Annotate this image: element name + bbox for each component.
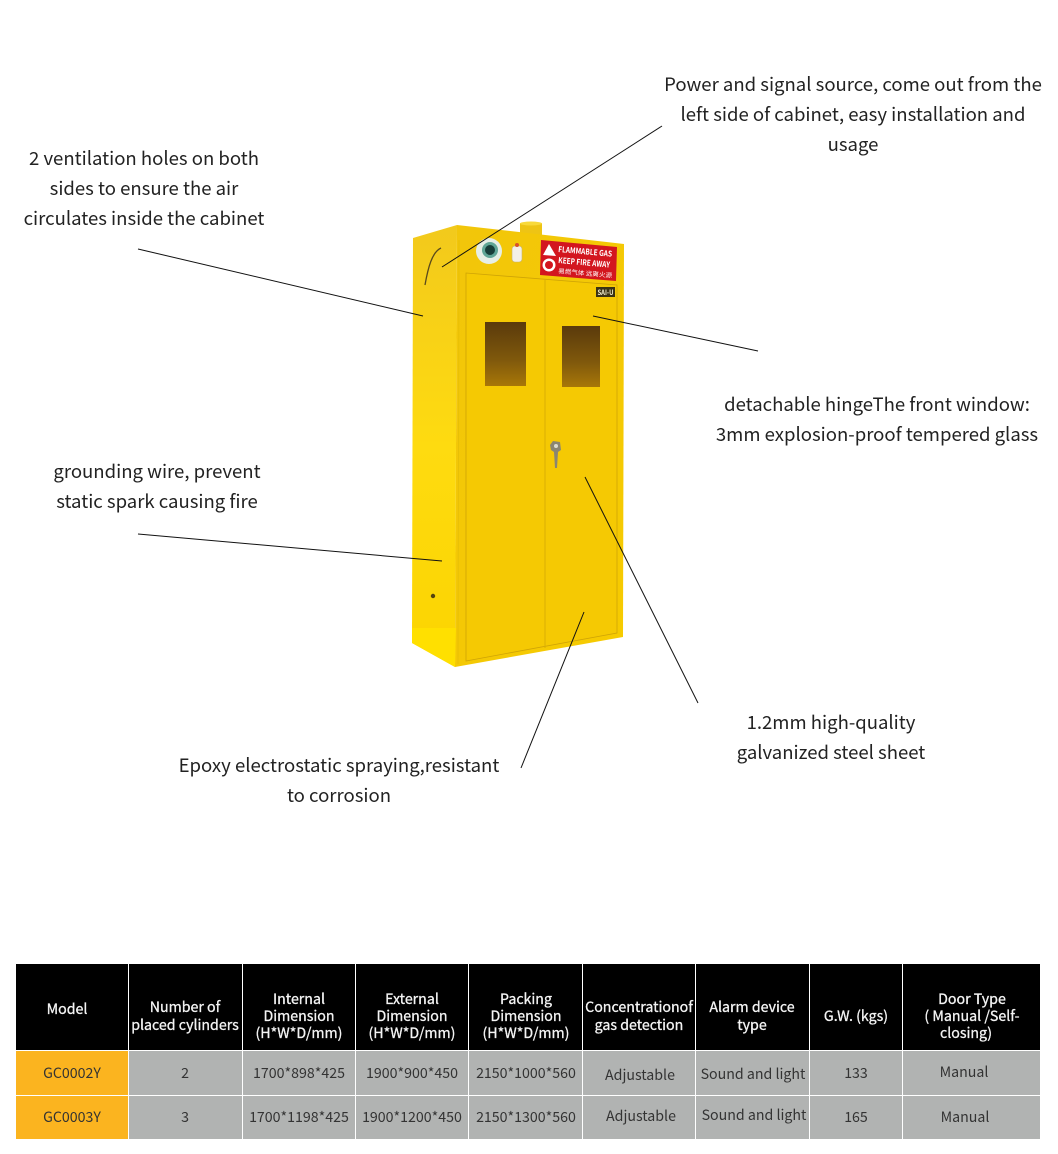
table header row: Packing bbox=[500, 989, 552, 1009]
warning sign: 易燃气体 远离火源 bbox=[558, 266, 612, 280]
table row: GC0002Y: Sound and light bbox=[701, 1064, 806, 1084]
callout: steel sheet bbox=[737, 708, 925, 765]
table row: GC0003Y: 1700*1198*425 bbox=[249, 1107, 349, 1127]
callout: power and signal source: left side of cabinet, easy installation and bbox=[681, 100, 1025, 127]
leader line: hinge and front window bbox=[593, 316, 758, 351]
table row: GC0003Y: Manual bbox=[941, 1107, 989, 1127]
table row: GC0003Y: 2150*1300*560 bbox=[476, 1107, 576, 1127]
cabinet bottom edge bbox=[412, 628, 456, 667]
table row: GC0002Y: 133 bbox=[844, 1063, 868, 1083]
table header row: Number of bbox=[150, 997, 222, 1017]
table row: GC0002Y: 1900*900*450 bbox=[366, 1063, 458, 1083]
table row: GC0003Y: 165 bbox=[844, 1107, 868, 1127]
callout: ventilation holes bbox=[24, 144, 264, 231]
table header row: Concentrationof bbox=[585, 997, 694, 1017]
callout: grounding wire bbox=[53, 457, 261, 514]
callout: power and signal source: usage bbox=[828, 130, 878, 157]
table row: GC0002Y: 1700*898*425 bbox=[253, 1063, 345, 1083]
callout: hinge and front window: detachable hingeThe front window: bbox=[724, 390, 1030, 417]
callout: epoxy spraying: Epoxy electrostatic spraying,resistant bbox=[179, 751, 499, 778]
leader line: ventilation holes bbox=[138, 249, 423, 316]
table row: GC0003Y: 1900*1200*450 bbox=[362, 1107, 462, 1127]
table header row: (H*W*D/mm) bbox=[256, 1023, 342, 1043]
right window bbox=[562, 326, 600, 387]
callout: steel sheet: 1.2mm high-quality bbox=[747, 708, 916, 735]
table row: GC0002Y: 2 bbox=[181, 1063, 189, 1083]
table header row bbox=[16, 964, 1040, 1050]
table header row: placed cylinders bbox=[131, 1015, 239, 1035]
leader line: epoxy spraying bbox=[521, 612, 584, 768]
ground hole bbox=[431, 594, 435, 598]
callout: ventilation holes: 2 ventilation holes on both bbox=[29, 144, 259, 171]
callout: power and signal source: Power and signal source, come out from the bbox=[664, 70, 1042, 97]
callout: hinge and front window: 3mm explosion-proof tempered glass bbox=[716, 420, 1038, 447]
callout: ventilation holes: sides to ensure the air bbox=[50, 174, 239, 201]
illustration: yellow gas cylinder cabinet bbox=[412, 222, 624, 667]
leader line: grounding wire bbox=[138, 534, 442, 561]
table header row: type bbox=[737, 1015, 767, 1035]
warning sign bbox=[540, 240, 617, 281]
cabinet left side panel bbox=[412, 225, 457, 667]
callout: ventilation holes: circulates inside the cabinet bbox=[24, 204, 264, 231]
table header row: Dimension bbox=[490, 1006, 562, 1026]
table header row: Internal bbox=[273, 989, 325, 1009]
callout: epoxy spraying: to corrosion bbox=[287, 781, 391, 808]
table header row: G.W. (kgs) bbox=[824, 1006, 888, 1026]
table row: GC0002Y: Adjustable bbox=[605, 1065, 675, 1085]
table header row: gas detection bbox=[595, 1015, 683, 1035]
door panels bbox=[458, 240, 617, 664]
table header row: Model bbox=[47, 999, 87, 1019]
ground wire bbox=[425, 248, 441, 285]
leader line: power and signal source bbox=[442, 126, 662, 267]
brand tag: SAI-U bbox=[598, 288, 614, 298]
cabinet front body bbox=[455, 225, 624, 667]
gas detector dial bbox=[476, 238, 502, 264]
table header row: Alarm device bbox=[709, 997, 795, 1017]
callout: epoxy spraying bbox=[179, 751, 499, 808]
table row: GC0002Y bbox=[16, 1051, 1040, 1095]
specification table bbox=[16, 964, 1040, 1139]
callout: steel sheet: galvanized steel sheet bbox=[737, 738, 925, 765]
warning sign: FLAMMABLE GAS bbox=[558, 244, 612, 260]
alarm light bbox=[512, 243, 522, 262]
door lock bbox=[550, 441, 561, 468]
table header row: ( Manual /Self- bbox=[924, 1006, 1020, 1026]
table header row: closing) bbox=[940, 1023, 992, 1043]
warning sign: KEEP FIRE AWAY bbox=[558, 255, 611, 271]
table header row: Dimension bbox=[376, 1006, 448, 1026]
table row: GC0002Y: 2150*1000*560 bbox=[476, 1063, 576, 1083]
table header row: Door Type bbox=[938, 989, 1006, 1009]
callout: grounding wire: grounding wire, prevent bbox=[53, 457, 261, 484]
callout: hinge and front window bbox=[716, 390, 1038, 447]
leader line: steel sheet bbox=[585, 477, 698, 703]
table header row: (H*W*D/mm) bbox=[483, 1023, 569, 1043]
table row: GC0002Y: GC0002Y bbox=[43, 1063, 101, 1083]
table row: GC0003Y: Sound and light bbox=[702, 1105, 807, 1125]
top vent pipe bbox=[520, 222, 542, 238]
table row: GC0003Y: 3 bbox=[181, 1107, 189, 1127]
table row: GC0003Y bbox=[16, 1096, 1040, 1139]
table header row: Dimension bbox=[263, 1006, 335, 1026]
table row: GC0002Y: Manual bbox=[940, 1062, 988, 1082]
table row: GC0003Y: Adjustable bbox=[606, 1106, 676, 1126]
callout: power and signal source bbox=[664, 70, 1042, 157]
left window bbox=[485, 322, 526, 386]
table header row: (H*W*D/mm) bbox=[369, 1023, 455, 1043]
callout: grounding wire: static spark causing fire bbox=[56, 487, 258, 514]
table header row: External bbox=[385, 989, 439, 1009]
table row: GC0003Y: GC0003Y bbox=[43, 1107, 101, 1127]
